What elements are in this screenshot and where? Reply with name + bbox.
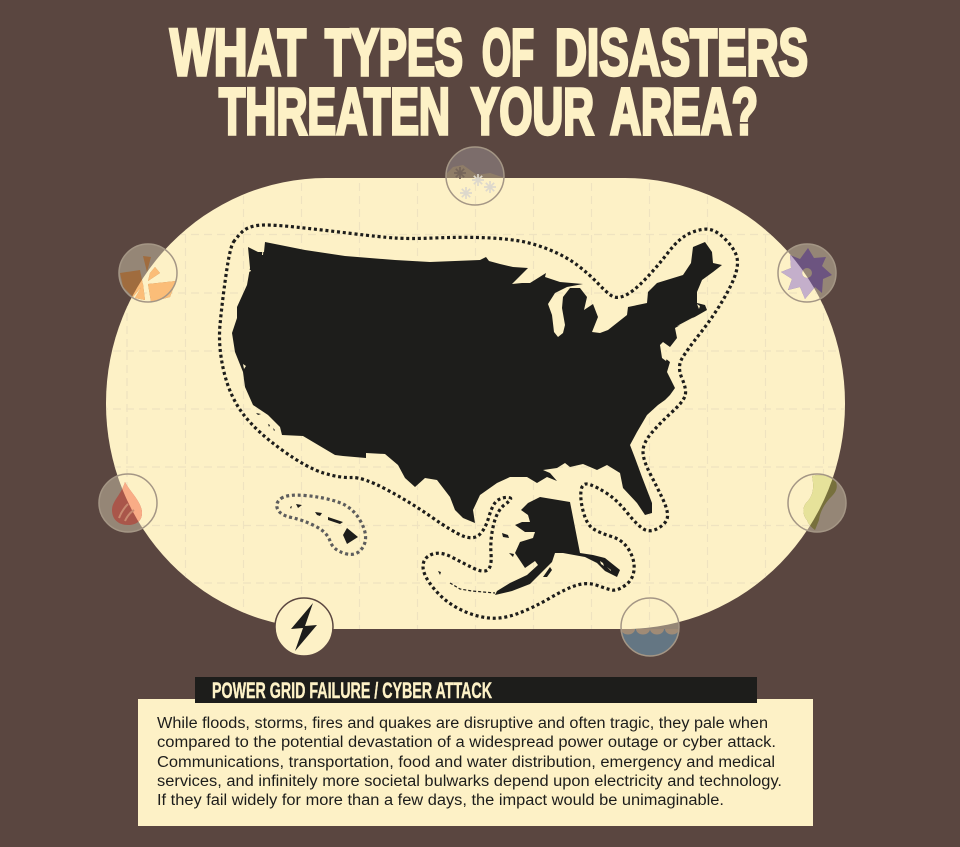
body text: While floods, storms, fires and quakes are disruptive and often tragic, they pale when bbox=[157, 715, 768, 732]
Chesapeake and Long Island Sound bbox=[660, 317, 695, 361]
panel: description bbox=[138, 677, 813, 826]
title: DISASTERS bbox=[555, 16, 808, 89]
dotted boundary: Hawaii bbox=[277, 495, 366, 554]
icon: hurricane saw blade bbox=[778, 244, 836, 302]
title: THREATEN bbox=[219, 75, 450, 148]
body text: If they fail widely for more than a few days, the impact would be unimaginable. bbox=[157, 792, 724, 809]
icon: flame drop bbox=[99, 474, 157, 532]
map: Alaska bbox=[438, 497, 620, 595]
icon: winter storm bbox=[445, 146, 505, 206]
dotted boundary: mainland and Alaska bbox=[220, 225, 738, 618]
title: YOUR bbox=[471, 75, 594, 148]
body text: compared to the potential devastation of a widespread power outage or cyber attack. bbox=[157, 734, 776, 751]
body text: Communications, transportation, food and water distribution, emergency and medical bbox=[157, 754, 775, 771]
title: OF bbox=[482, 16, 534, 89]
icon: wildfire burst bbox=[119, 244, 177, 302]
icon backdrops behind map panel bbox=[99, 147, 846, 656]
icon: lightning bolt bbox=[275, 598, 333, 656]
icon: flood water bbox=[620, 598, 680, 659]
map: Hawaii bbox=[290, 504, 358, 544]
coastal specks bbox=[256, 413, 275, 431]
heading bar: POWER GRID FAILURE / CYBER ATTACK bbox=[212, 678, 492, 703]
title: AREA? bbox=[610, 75, 758, 148]
icon: yellow gas plume bbox=[788, 474, 846, 532]
body text bbox=[157, 715, 782, 809]
panel: map background bbox=[100, 170, 850, 640]
body text: services, and infinitely more societal bulwarks depend upon electricity and technology. bbox=[157, 773, 782, 790]
map: contiguous United States bbox=[232, 242, 722, 523]
title: TYPES bbox=[325, 16, 463, 89]
title bbox=[170, 16, 808, 148]
title: WHAT bbox=[170, 16, 306, 89]
